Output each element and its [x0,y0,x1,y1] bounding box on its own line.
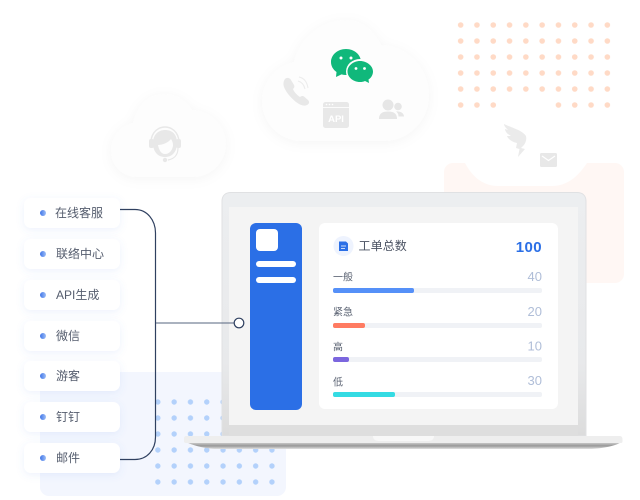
row: 低: 30 [528,373,542,388]
row: 紧急: 紧急 [333,306,353,318]
channel list [24,198,120,473]
sidebar line 1 [256,261,296,267]
row: 低 [333,373,542,397]
laptop base underside [186,442,621,449]
item: 在线客服: 在线客服 [55,205,103,220]
row: 紧急 [333,304,542,328]
background dots: blue [150,394,280,490]
icon: document [334,236,354,256]
item: 邮件 [24,443,120,473]
icon: users [379,100,404,119]
item: API生成 [24,280,120,310]
row: 低: 低 [333,376,343,388]
item: 游客: 游客 [56,368,80,383]
item: 游客 [24,361,120,391]
cloud: customer service [111,94,226,177]
cloud: dingtalk and email [465,120,587,186]
connector bracket [120,210,156,460]
cloud shape large [262,20,429,141]
laptop lid [222,192,586,436]
row: 紧急: 20 [528,304,542,319]
icon: envelope [540,153,557,167]
item: 联络中心: 联络中心 [56,246,104,261]
laptop base [184,436,622,443]
background dots: orange [452,17,616,113]
icon: headset agent [149,127,181,162]
sidebar line 2 [256,277,296,283]
sidebar avatar [256,229,278,251]
item: 邮件: 邮件 [56,451,80,465]
icon: wechat [331,49,374,84]
item: 微信 [24,321,120,351]
cloud shape white [465,120,587,186]
laptop screen [229,207,578,425]
row: 高: 高 [333,340,343,354]
row: 一般: 一般 [333,270,353,284]
cloud: channels [262,20,429,141]
row: 一般: 40 [528,269,542,284]
connector to laptop [156,318,244,328]
item: 联络中心 [24,239,120,269]
row: 一般 [333,269,542,293]
background panel: light blue [40,372,286,496]
laptop [184,192,622,449]
row: 高 [333,338,542,362]
item: 钉钉 [24,402,120,432]
item: 在线客服 [24,198,120,228]
sidebar [250,223,302,410]
row: 高: 10 [528,338,542,354]
icon: API window [323,102,349,128]
item: 微信: 微信 [56,329,80,343]
cloud shape small [111,94,226,177]
laptop notch [373,436,434,441]
icon: phone [283,77,309,106]
ticket stats card [319,223,558,409]
background panel: light pink [444,163,624,283]
heading: 工单总数: 工单总数 [358,238,407,253]
item: 钉钉: 钉钉 [56,410,80,424]
icon: API window: API [328,114,344,125]
total: 100: 100 [516,239,542,256]
icon: dingtalk [504,124,526,157]
laptop lower bezel [229,425,578,436]
item: API生成: API生成 [56,288,99,302]
